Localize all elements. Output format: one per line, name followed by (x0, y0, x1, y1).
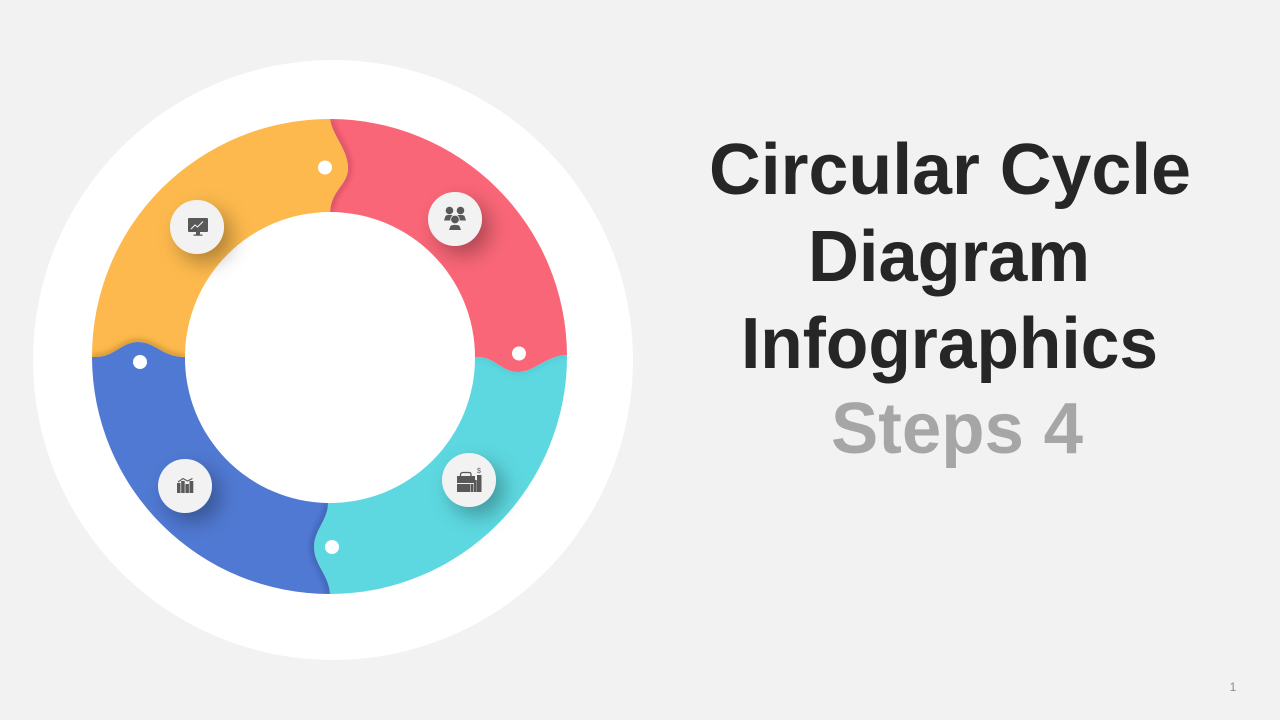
white backing circle (33, 60, 633, 660)
segment: red, top right (330, 119, 567, 372)
segment: orange, top left (92, 119, 348, 357)
title: Steps 4 (831, 389, 1083, 469)
icon button: briefcase and rising bars: $ (477, 468, 481, 475)
title (709, 130, 1191, 469)
page number: 1 (1230, 680, 1237, 694)
segment: blue, bottom left (92, 342, 330, 594)
icon button: monitor with chart (170, 200, 224, 254)
title: Circular Cycle (709, 130, 1191, 210)
icon button: bar chart with trend line (158, 459, 212, 513)
circular cycle diagram (92, 119, 567, 594)
icon button: briefcase and rising bars (442, 453, 496, 507)
segment: teal, bottom right (314, 355, 567, 594)
icon button: people group (428, 192, 482, 246)
title: Diagram (808, 217, 1090, 297)
title: Infographics (741, 304, 1158, 384)
